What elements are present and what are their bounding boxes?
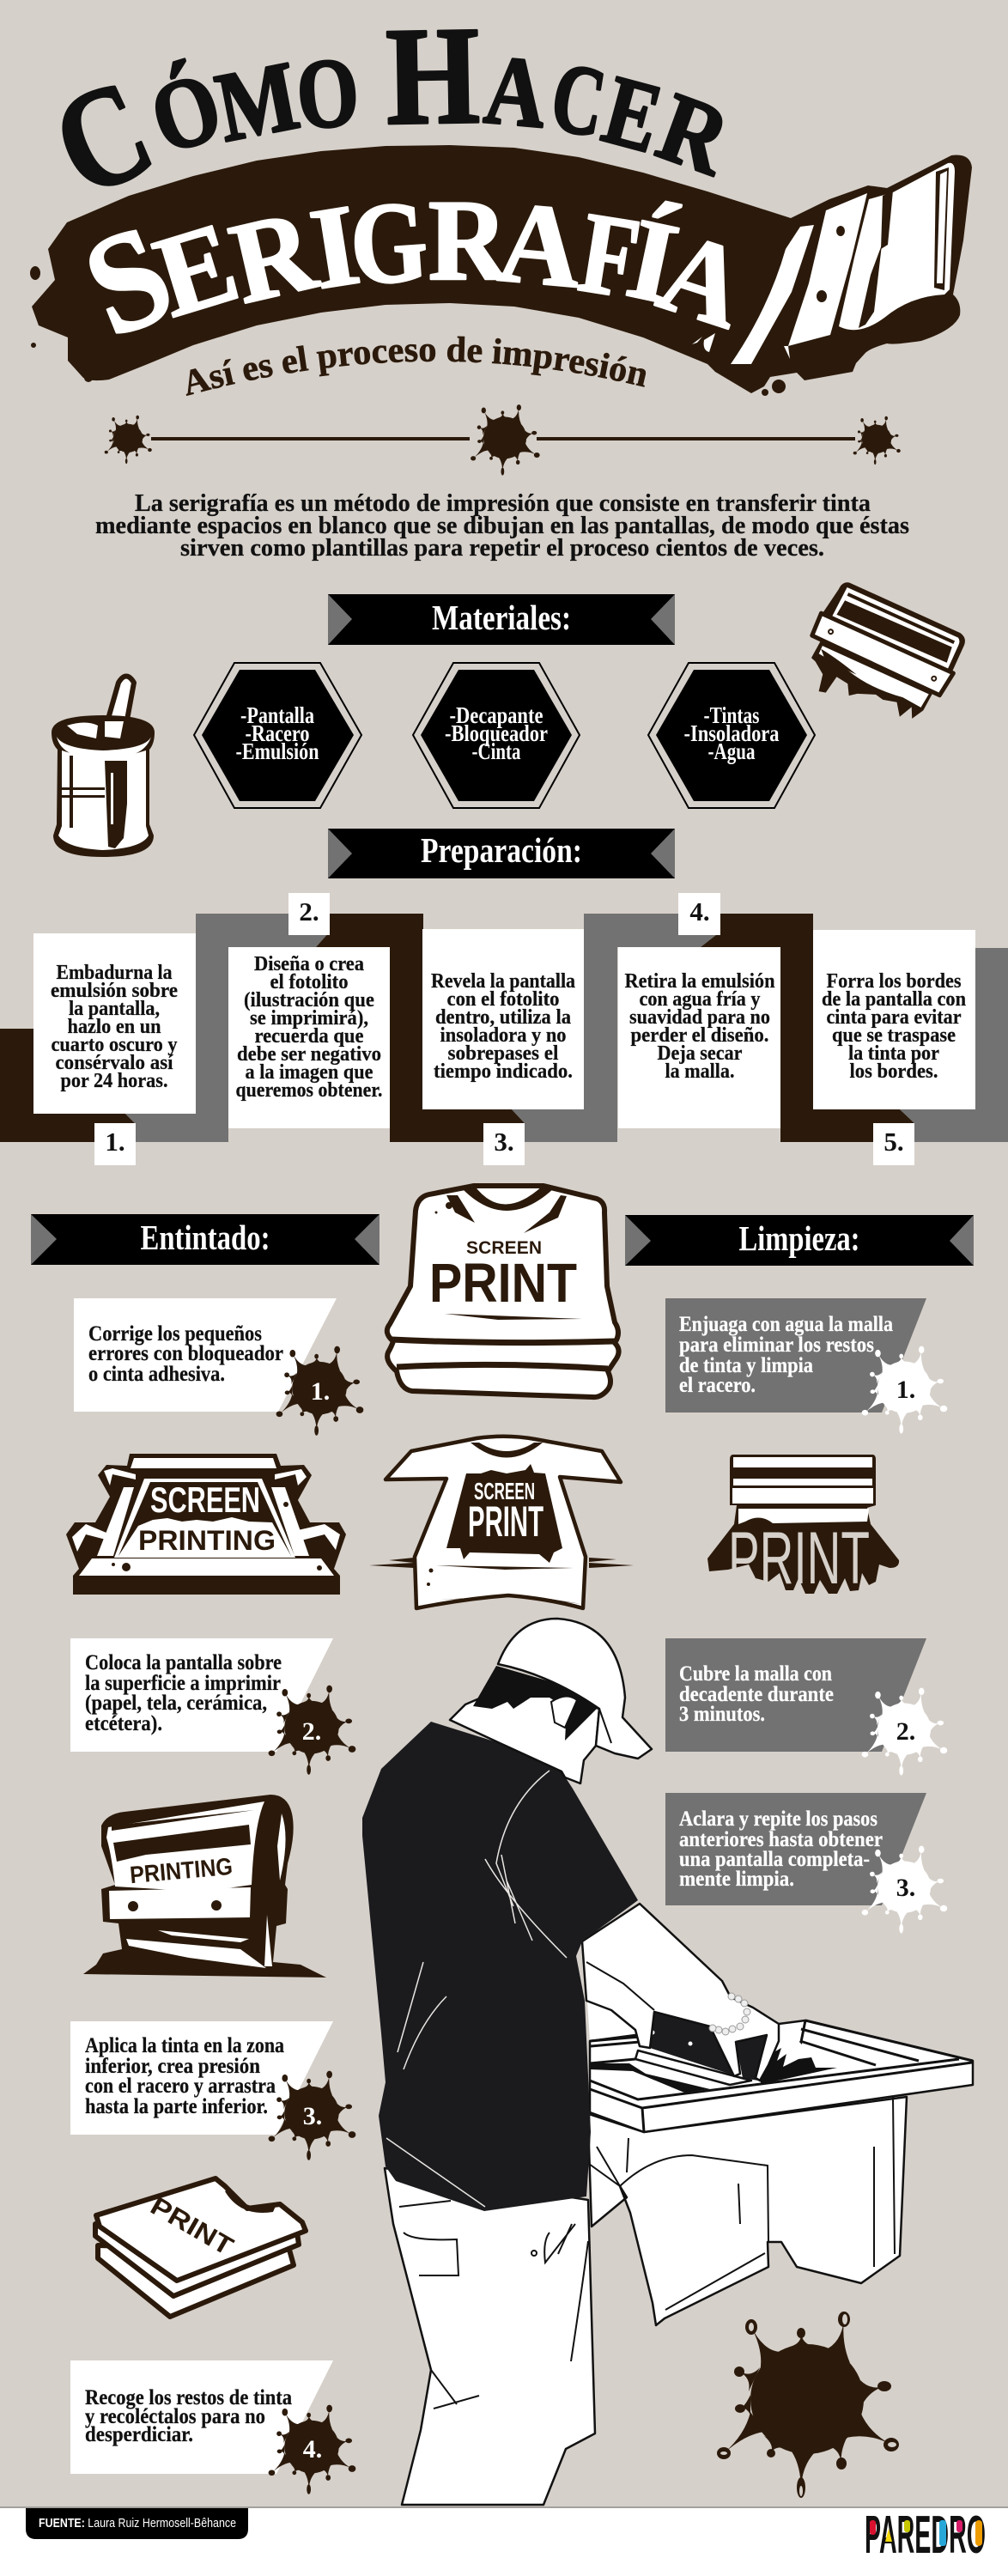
- step callout: limpieza 3: Aclara y repite los pasos: [679, 1807, 877, 1831]
- title: Serigrafía: A: [494, 177, 586, 312]
- step callout: entintado 2: Coloca la pantalla sobre: [85, 1651, 282, 1674]
- title: Cómo Hacer: R: [645, 71, 744, 197]
- hair: [473, 1666, 599, 1741]
- ink on the mesh: [590, 2048, 837, 2093]
- icon: squeegee with print drips: [707, 1455, 899, 1600]
- title: Serigrafía: A: [646, 208, 761, 354]
- step 3: 3.: [494, 1127, 514, 1157]
- step 3: Revela la pantalla: [431, 970, 575, 993]
- subtitle: Así es el proceso de impresión: [185, 337, 646, 397]
- step callout: entintado 2: (papel, tela, cerámica,: [85, 1692, 267, 1715]
- squeegee blade: [635, 2050, 751, 2085]
- icon: screen printing frame: [66, 1454, 346, 1595]
- illustration: screen frame and shirt: [587, 2001, 973, 2325]
- step callout: limpieza 2: 2.: [896, 1717, 915, 1746]
- heading ribbon: Materiales: Materiales:: [432, 598, 571, 637]
- intro text: sirven como plantillas para repetir el proceso cientos de veces.: [180, 534, 824, 562]
- title: Cómo Hacer: A: [481, 35, 550, 149]
- step 3: dentro, utiliza la: [435, 1006, 571, 1029]
- step callout: limpieza 2: 3 minutos.: [679, 1703, 765, 1726]
- heading ribbon: Limpieza: [625, 1215, 974, 1266]
- frame: [590, 2020, 973, 2132]
- cap: [498, 1619, 652, 1759]
- step callout: entintado 4: y recoléctalos para no: [85, 2405, 265, 2428]
- step 3: [422, 929, 584, 1165]
- icon: printed t-shirt: SCREEN: [474, 1478, 535, 1504]
- step callout: limpieza 2: decadente durante: [679, 1683, 834, 1706]
- heading ribbon: Materiales: [328, 594, 675, 645]
- squeegee body: [650, 2012, 767, 2081]
- step 4: [618, 893, 780, 1128]
- step callout: entintado 1: Corrige los pequeños: [88, 1322, 262, 1346]
- title: Cómo Hacer: M: [208, 41, 307, 163]
- step 4: Deja secar: [658, 1042, 743, 1065]
- title: Serigrafía: R: [428, 177, 509, 305]
- step callout: limpieza 3: 3.: [896, 1874, 915, 1902]
- title: Cómo Hacer: Ó: [139, 52, 234, 175]
- icon: squeegee printing: PRINTING: [129, 1853, 234, 1888]
- icon: screen printing frame: PRINTING: [138, 1525, 276, 1556]
- hexagon 3: -Tintas: [704, 702, 759, 728]
- step 4: suavidad para no: [629, 1006, 770, 1029]
- corner brackets: [72, 1468, 340, 1552]
- step callout: limpieza 1: 1.: [896, 1376, 915, 1404]
- source pill: FUENTE: Laura Ruiz Hermosell-Bêhance: [39, 2516, 236, 2530]
- icon: squeegee with ink: [792, 577, 969, 738]
- step callout: entintado 3: inferior, crea presión: [85, 2055, 260, 2078]
- step 2: se imprimirá),: [250, 1007, 368, 1030]
- icon: stacked screen print t-shirts: [387, 1185, 619, 1397]
- stick: [103, 677, 134, 738]
- shirt under the frame: [589, 2097, 907, 2325]
- step 1: hazlo en un: [67, 1016, 161, 1038]
- icon: stacked screen print t-shirts: SCREEN: [466, 1238, 542, 1258]
- step 2: 2.: [299, 896, 319, 927]
- step 1: consérvalo así: [55, 1052, 173, 1074]
- step 3: sobrepases el: [448, 1042, 559, 1065]
- title: Serigrafía: G: [346, 177, 432, 310]
- intro text: mediante espacios en blanco que se dibujan en las pantallas, de modo que éstas: [95, 512, 909, 539]
- icon: large ink splat: [717, 2312, 899, 2498]
- step callout: entintado 3: Aplica la tinta en la zona: [85, 2034, 284, 2057]
- intro text: [95, 489, 909, 562]
- squeegee blade strips: [692, 163, 955, 364]
- step 4: con agua fría y: [639, 988, 761, 1011]
- icon: printed t-shirt: PRINT: [468, 1498, 543, 1546]
- step callout: entintado 3: con el racero y arrastra: [85, 2075, 276, 2098]
- icon: printed t-shirt: [369, 1437, 634, 1608]
- step callout: entintado 3: hasta la parte inferior.: [85, 2095, 268, 2118]
- title banner with squeegee: [30, 145, 972, 396]
- squeegee dark details: [817, 167, 949, 328]
- step 5: los bordes.: [850, 1060, 938, 1083]
- step 1: [33, 933, 196, 1165]
- source pill: [26, 2508, 248, 2539]
- step 1: Embadurna la: [57, 962, 172, 984]
- step 5: 5.: [884, 1127, 904, 1157]
- arm and hand: [582, 1904, 779, 2081]
- step 2: [228, 893, 390, 1128]
- title: Serigrafía: E: [142, 197, 252, 342]
- divider with ink splats: [105, 404, 901, 476]
- step 5: cinta para evitar: [826, 1006, 962, 1029]
- step callout: limpieza 3: anteriores hasta obtener: [679, 1828, 883, 1851]
- step callout: entintado 4: [70, 2360, 355, 2494]
- step 1: 1.: [105, 1127, 125, 1157]
- footer: [0, 2506, 1008, 2576]
- step callout: entintado 1: o cinta adhesiva.: [88, 1363, 225, 1386]
- intro text: La serigrafía es un método de impresión que consiste en transferir tinta: [135, 489, 871, 517]
- step 3: tiempo indicado.: [434, 1060, 573, 1083]
- step callout: entintado 4: 4.: [303, 2435, 322, 2464]
- title: Serigrafía: [64, 177, 761, 368]
- step 2: recuerda que: [254, 1025, 364, 1048]
- step 4: perder el diseño.: [630, 1024, 769, 1047]
- step callout: limpieza 1: Enjuaga con agua la malla: [679, 1313, 893, 1336]
- icon: screen printing frame: SCREEN: [150, 1479, 260, 1520]
- step 1: cuarto oscuro y: [52, 1034, 177, 1056]
- title: Cómo Hacer: O: [292, 36, 363, 150]
- step callout: entintado 1: errores con bloqueador: [88, 1342, 283, 1365]
- step 1: emulsión sobre: [51, 980, 178, 1002]
- step 5: [813, 930, 975, 1165]
- step 2: Diseña o crea: [254, 953, 364, 975]
- title: Cómo Hacer: C: [543, 41, 613, 158]
- chest under the arm: [587, 2001, 640, 2041]
- step callout: entintado 3: 3.: [303, 2102, 322, 2130]
- step callout: entintado 3: [70, 2021, 355, 2160]
- step callout: limpieza 1: de tinta y limpia: [679, 1354, 813, 1377]
- step callout: limpieza 2: Cubre la malla con: [679, 1662, 832, 1686]
- title: Serigrafía: Í: [617, 194, 688, 329]
- heading ribbon: Preparación: Preparación:: [421, 830, 582, 870]
- step 4: 4.: [689, 896, 710, 927]
- icon: folded shirts: PRINT: [146, 2191, 238, 2262]
- bracelet: [709, 1993, 750, 2035]
- step callout: entintado 2: la superficie a imprimir: [85, 1672, 281, 1695]
- step 5: de la pantalla con: [822, 988, 966, 1011]
- step callout: entintado 2: etcétera).: [85, 1712, 162, 1735]
- icon: squeegee printing: [83, 1795, 326, 1978]
- step 2: el fotolito: [270, 971, 349, 993]
- icon: stacked screen print t-shirts: PRINT: [429, 1252, 577, 1314]
- step 3: con el fotolito: [446, 988, 560, 1011]
- ink droplets: [30, 266, 786, 396]
- hexagon 2: [413, 663, 580, 808]
- title: Cómo Hacer: [32, 0, 744, 227]
- icon: squeegee with print drips: PRINT: [728, 1517, 870, 1600]
- step callout: entintado 2: 2.: [302, 1717, 321, 1746]
- hexagon 3: -Insoladora: [683, 720, 780, 746]
- step 2: queremos obtener.: [235, 1079, 383, 1102]
- step callout: entintado 1: 1.: [311, 1377, 330, 1406]
- title: Cómo Hacer: H: [385, 0, 481, 154]
- step 5: Forra los bordes: [826, 970, 962, 993]
- step callout: limpieza 1: [665, 1298, 947, 1434]
- step 5: la tinta por: [848, 1042, 939, 1065]
- hexagon 2: -Decapante: [450, 702, 543, 728]
- head and neck: [450, 1683, 599, 1783]
- title: Cómo Hacer: C: [32, 49, 173, 227]
- panel: materials hexagons: [194, 663, 815, 808]
- step callout: limpieza 1: el racero.: [679, 1374, 756, 1397]
- title: Serigrafía: I: [302, 180, 367, 314]
- step callout: limpieza 3: mente limpia.: [679, 1868, 794, 1891]
- title: Serigrafía: F: [572, 188, 647, 324]
- step 2: a la imagen que: [246, 1061, 373, 1084]
- hexagon 1: -Racero: [246, 720, 309, 746]
- step 3: insoladora y no: [440, 1024, 567, 1047]
- hexagon 2: -Bloqueador: [445, 720, 548, 746]
- step callout: limpieza 3: una pantalla completa-: [679, 1848, 870, 1871]
- step 2: (ilustración que: [244, 989, 374, 1012]
- heading ribbon: Entintado: [31, 1214, 380, 1265]
- icon: folded shirts: [95, 2178, 306, 2317]
- step 1: por 24 horas.: [60, 1070, 168, 1092]
- step 2: debe ser negativo: [237, 1043, 381, 1066]
- hexagon 1: -Emulsión: [235, 738, 319, 764]
- step callout: limpieza 1: para eliminar los restos: [679, 1334, 874, 1357]
- step 5: que se traspase: [832, 1024, 956, 1047]
- hexagon 1: -Pantalla: [240, 702, 314, 728]
- heading ribbon: Limpieza: Limpieza:: [738, 1218, 860, 1258]
- heading ribbon: Entintado: Entintado:: [141, 1218, 270, 1257]
- hexagon 3: -Agua: [707, 738, 756, 764]
- step callout: entintado 4: Recoge los restos de tinta: [85, 2386, 292, 2409]
- step callout: entintado 4: desperdiciar.: [85, 2423, 193, 2446]
- step 4: Retira la emulsión: [625, 970, 774, 993]
- step 4: la malla.: [665, 1060, 735, 1083]
- step callout: limpieza 3: [665, 1793, 947, 1934]
- hexagon 2: -Cinta: [472, 738, 521, 764]
- illustration: person printing: [362, 1619, 779, 2505]
- title: Serigrafía: S: [64, 194, 192, 368]
- heading ribbon: Preparación: [328, 829, 675, 878]
- title: Cómo Hacer: E: [593, 54, 672, 173]
- hexagon 3: [648, 663, 815, 808]
- hexagon 1: [194, 663, 361, 808]
- title: Serigrafía: R: [220, 185, 328, 328]
- icon: ink can: [52, 677, 155, 857]
- step callout: entintado 1: [74, 1298, 363, 1436]
- panel: preparation steps: [0, 893, 1008, 1165]
- step callout: entintado 2: [70, 1638, 355, 1775]
- pants: [385, 2168, 595, 2505]
- step 1: la pantalla,: [69, 998, 160, 1020]
- side bars and mesh: [97, 1487, 309, 1556]
- collar: [464, 1185, 554, 1211]
- step callout: limpieza 2: [665, 1638, 947, 1776]
- shirt: [362, 1722, 638, 2211]
